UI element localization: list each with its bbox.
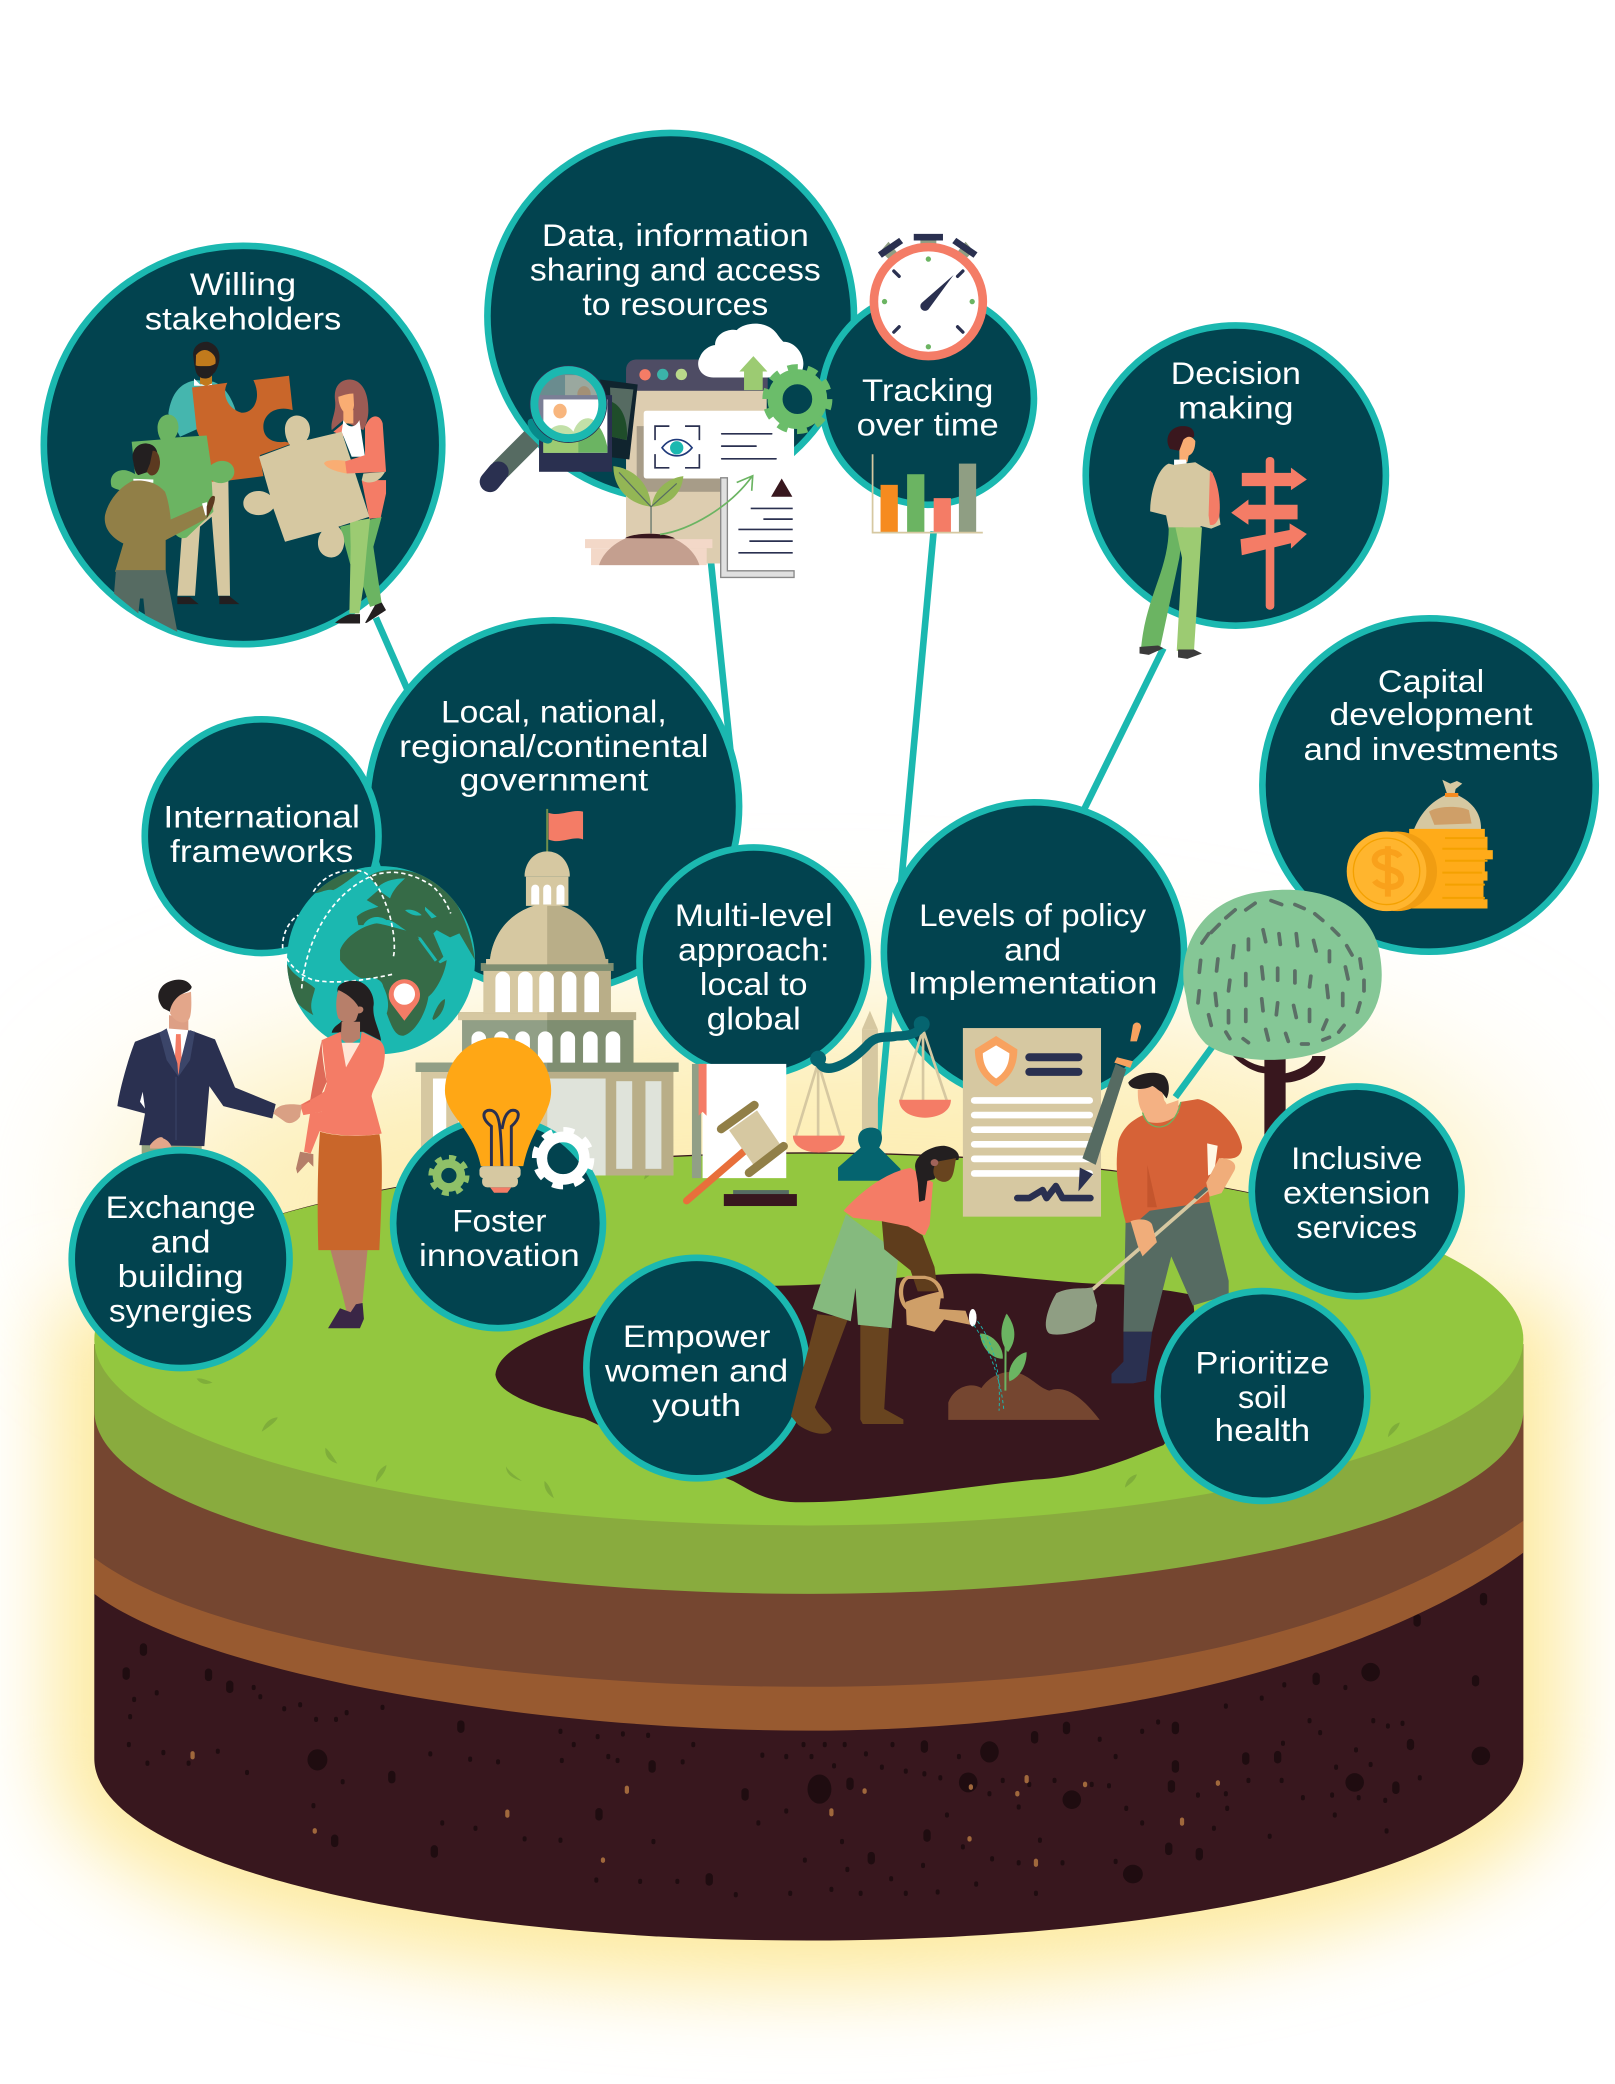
panel: tracking over time (821, 234, 1034, 533)
heading: government (399, 694, 709, 797)
heading: capital: development (1329, 696, 1533, 732)
grass top (94, 1154, 1523, 1525)
heading: tracking (857, 372, 999, 443)
heading: decision (1171, 355, 1301, 425)
heading: foster: Foster (452, 1202, 547, 1238)
illustration: man thinking (1140, 426, 1221, 659)
heading: multi-level: Multi-level (675, 897, 833, 933)
heading: international: International (163, 799, 360, 835)
heading: government: government (460, 761, 648, 797)
heading: international (163, 799, 360, 869)
horizon outline (98, 1152, 1519, 1524)
heading: inclusive: Inclusive (1291, 1140, 1422, 1176)
heading: levels: Levels of policy (919, 897, 1146, 933)
heading: foster: innovation (419, 1237, 580, 1273)
heading: levels: and (1004, 931, 1061, 967)
heading: decision: Decision (1171, 355, 1301, 391)
icon: globe with location pin (283, 866, 475, 1054)
illustration: woman in suit (273, 981, 385, 1328)
heading: exchange: synergies (109, 1293, 252, 1329)
heading: multi-level: global (707, 1000, 801, 1036)
heading: data (530, 217, 821, 322)
panel: foster innovation (393, 1037, 603, 1328)
heading: multi-level: local to (700, 966, 808, 1002)
panel: decision making (1086, 325, 1386, 659)
heading: multi-level: approach: (678, 931, 829, 967)
brown soil layer (94, 1344, 1523, 1687)
panel: willing stakeholders (44, 246, 442, 644)
soil patch (495, 1274, 1202, 1502)
heading: exchange: building (118, 1258, 244, 1294)
dark subsoil layer (94, 1344, 1523, 1940)
heading: exchange (106, 1189, 256, 1329)
panel: data, information sharing (487, 133, 854, 499)
heading: data: sharing and access (530, 251, 821, 287)
heading: multi-level (675, 897, 833, 1036)
heading: prioritize (1195, 1344, 1329, 1448)
dark grass edge (94, 1344, 1523, 1594)
icon: browser, magnifier and documents (490, 324, 828, 577)
illustration: man in suit (117, 980, 276, 1158)
heading: data: to resources (582, 286, 768, 322)
heading: foster (419, 1202, 580, 1273)
icon: capitol building (416, 809, 679, 1175)
heading: willing: Willing (190, 266, 296, 302)
heading: levels (908, 897, 1157, 1001)
illustration: seedling on mound (948, 1314, 1100, 1420)
panel: empower women and youth (586, 1258, 807, 1478)
connector lines (376, 531, 1215, 1136)
panel: prioritize soil health (1157, 1291, 1367, 1501)
icon: stopwatch (874, 234, 983, 356)
heading: international: frameworks (170, 833, 353, 869)
heading: prioritize: soil (1238, 1379, 1287, 1415)
heading: inclusive: extension (1283, 1174, 1430, 1210)
heading: decision: making (1178, 389, 1294, 425)
heading: data: Data, information (542, 217, 809, 253)
heading: tracking: over time (857, 407, 999, 443)
icon: pen (1078, 1023, 1141, 1191)
icon: gears (432, 1131, 590, 1193)
icon: money bag and coins (1347, 780, 1493, 911)
icon: law book and gavel (687, 1064, 797, 1206)
heading: empower (604, 1318, 788, 1423)
icon: light bulb (445, 1037, 551, 1193)
heading: government: regional/continental (399, 728, 709, 764)
panel: inclusive extension services (1252, 1086, 1462, 1296)
heading: prioritize: Prioritize (1195, 1344, 1329, 1380)
soil specks (126, 1596, 1490, 1895)
heading: inclusive (1283, 1140, 1430, 1245)
panel: levels of policy (884, 802, 1184, 1102)
heading: capital: and investments (1304, 731, 1559, 767)
heading: tracking: Tracking (862, 372, 993, 408)
heading: inclusive: services (1296, 1209, 1417, 1245)
heading: empower: youth (652, 1387, 741, 1423)
grass leaves (197, 1068, 1400, 1498)
heading: empower: Empower (623, 1318, 771, 1354)
panel: international frameworks (145, 719, 379, 953)
heading: capital: Capital (1378, 663, 1484, 699)
heading: prioritize: health (1215, 1412, 1310, 1448)
icon: scales of justice (793, 1011, 951, 1181)
illustration: people with puzzle pieces (105, 342, 386, 632)
background glow (53, 1003, 1565, 1986)
heading: exchange: and (151, 1224, 211, 1260)
soil cylinder (94, 1152, 1523, 1940)
illustration: woman with watering can (791, 1146, 1004, 1434)
heading: government: Local, national, (441, 694, 667, 730)
panel: local to continental government (367, 620, 739, 992)
orange soil layer (94, 1344, 1523, 1731)
icon: policy document (963, 1028, 1101, 1217)
heading: empower: women and (604, 1352, 788, 1388)
illustration: man with shovel (1046, 1073, 1242, 1383)
heading: exchange: Exchange (106, 1189, 256, 1225)
bar chart (873, 454, 983, 533)
icon: tree (1183, 890, 1382, 1142)
panel: multi-level approach (639, 847, 868, 1076)
heading: willing: stakeholders (145, 300, 341, 336)
panel: capital development (1262, 618, 1596, 952)
icon: signpost (1231, 457, 1307, 610)
heading: capital (1304, 663, 1559, 767)
panel: exchange and synergies (72, 1150, 290, 1368)
heading: willing (145, 266, 341, 336)
heading: levels: Implementation (908, 965, 1157, 1001)
